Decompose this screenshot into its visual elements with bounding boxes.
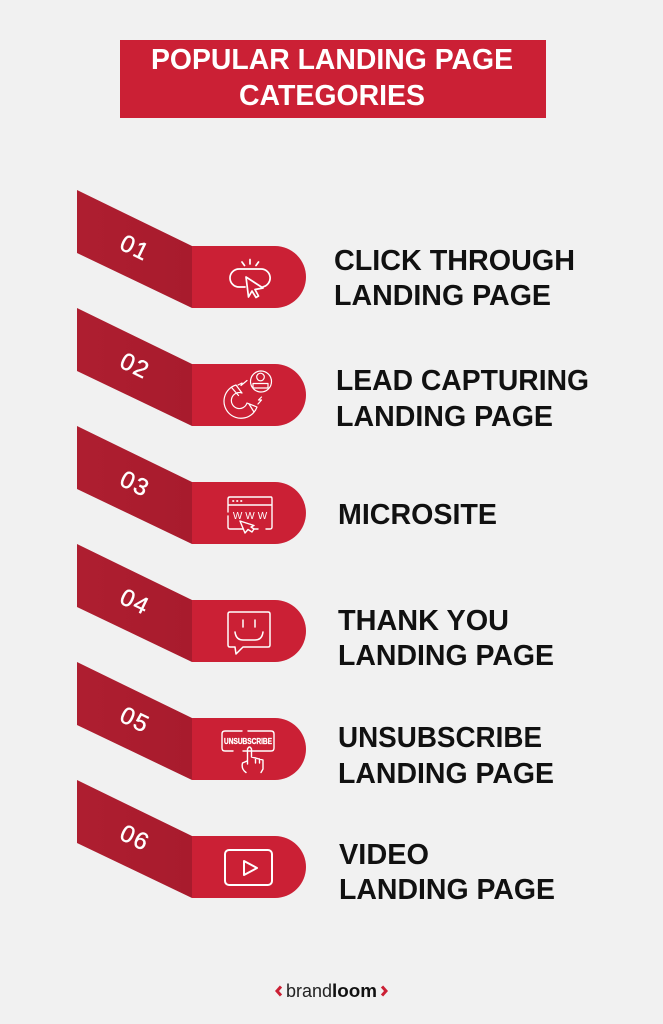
step 06: video [77,780,555,906]
label 05: UNSUBSCRIBE [338,722,542,754]
icon: click button [230,260,270,298]
label 04: THANK YOU [338,605,509,637]
label 01: CLICK THROUGH [334,245,575,277]
ribbon 04: 04 [116,584,154,621]
ribbon 04 [77,544,192,662]
label 05 [338,722,554,790]
title banner: POPULAR LANDING PAGE [151,44,513,76]
pill 06 [192,836,306,898]
label 02: LEAD CAPTURING [336,365,589,397]
icon: unsubscribe button with hand [222,731,274,772]
brandloom logo: brand [286,980,332,1001]
ribbon 01: 01 [116,230,154,267]
label 06: LANDING PAGE [339,874,555,906]
label 04 [338,605,554,672]
icon: browser www [228,497,272,533]
ribbon 05 [77,662,192,780]
ribbon 02 [77,308,192,426]
step 04: thank you [77,544,554,672]
label 05: LANDING PAGE [338,758,554,790]
ribbon 05: 05 [116,702,154,739]
icon: magnet and person [224,371,272,418]
label 02: LANDING PAGE [336,401,553,433]
ribbon 03 [77,426,192,544]
ribbon 06: 06 [116,820,154,857]
brandloom logo: loom [332,980,377,1001]
ribbon 03: 03 [116,466,154,503]
step 05: unsubscribe [77,662,554,790]
pill 04 [192,600,306,662]
brandloom logo [277,980,386,1001]
ribbon 02: 02 [116,348,154,385]
ribbon 06 [77,780,192,898]
label 06: VIDEO [339,839,429,871]
label 01 [334,245,575,312]
ribbon 01 [77,190,192,308]
label 03: MICROSITE [338,499,497,531]
icon: video play [225,850,272,885]
step 01: click through [77,190,575,312]
icon: unsubscribe button with hand: UNSUBSCRIBE [224,737,273,746]
label 02 [336,365,589,433]
step 02: lead capturing [77,308,589,433]
icon: smiley speech bubble [228,612,270,654]
label 06 [339,839,555,906]
icon: browser www: WWW [233,511,270,522]
label 01: LANDING PAGE [334,280,551,312]
step 03: microsite [77,426,497,544]
pill 05 [192,718,306,780]
pill 02 [192,364,306,426]
title banner: CATEGORIES [239,80,425,112]
label 04: LANDING PAGE [338,640,554,672]
title banner [120,40,546,118]
pill 03 [192,482,306,544]
pill 01 [192,246,306,308]
